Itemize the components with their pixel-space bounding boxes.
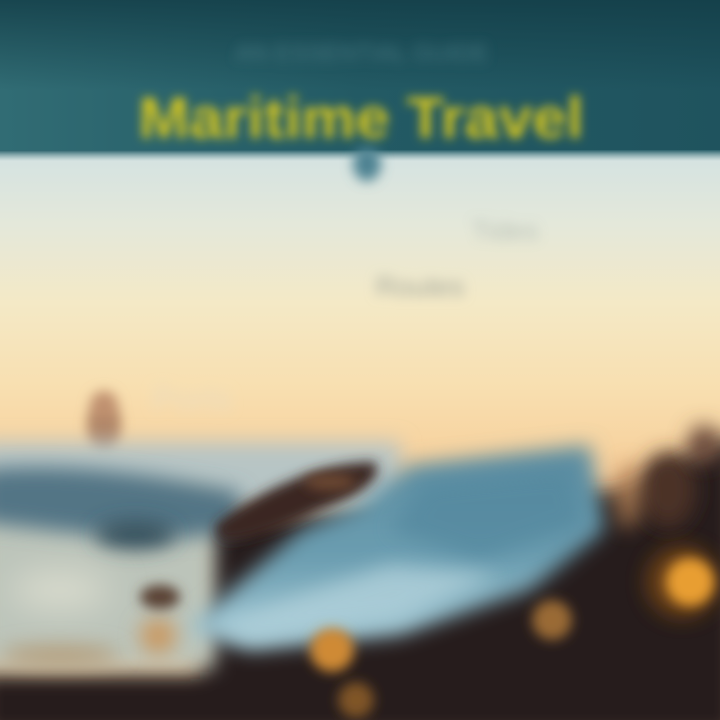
figure on shore	[87, 391, 121, 455]
dark hills right	[615, 425, 720, 529]
title: Maritime Travel	[138, 86, 584, 151]
dark ground	[0, 435, 720, 720]
glowing lights	[140, 546, 718, 718]
header band	[0, 0, 720, 181]
faint sky label: upper right: Tides	[471, 215, 539, 246]
sea and shore at left	[0, 442, 400, 668]
dark log	[215, 462, 377, 541]
faint sky label: lower left: Ports	[152, 380, 232, 418]
blue ice sheet	[185, 445, 605, 650]
faint sky label: centre: Routes	[376, 271, 464, 302]
header pointer	[353, 147, 381, 181]
header subtitle: AN ESSENTIAL GUIDE	[235, 40, 489, 67]
